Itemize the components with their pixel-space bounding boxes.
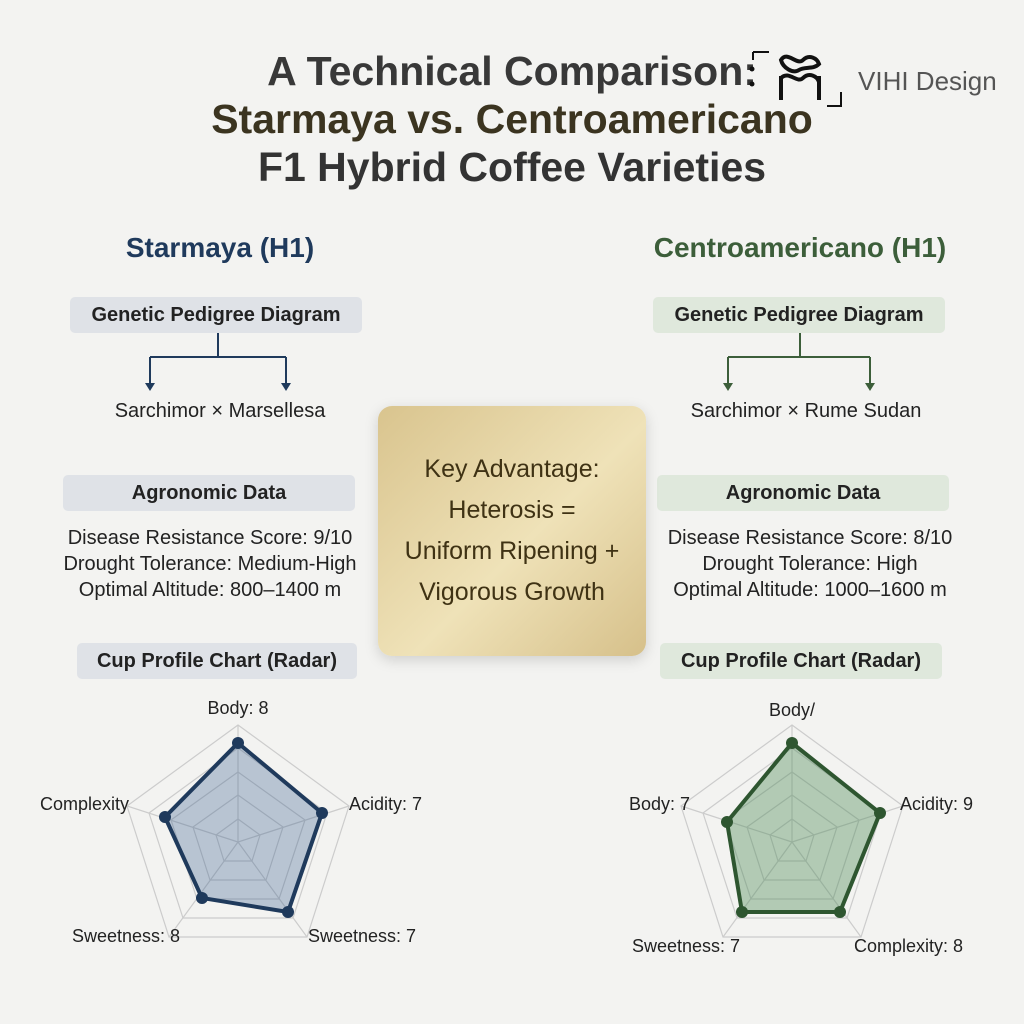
pill right pedigree <box>653 297 945 333</box>
radar chart right <box>629 700 973 956</box>
radar chart left: Sweetness: 7 <box>308 926 416 946</box>
radar chart right: Body: 7 <box>629 794 690 814</box>
pedigree text right: Sarchimor × Rume Sudan <box>691 400 921 422</box>
heading: Centroamericano: Centroamericano (H1) <box>654 232 946 263</box>
pedigree arrows right <box>723 333 875 391</box>
pill right cup profile: Cup Profile Chart (Radar) <box>681 650 921 672</box>
logo: VIHI Design <box>858 66 997 96</box>
agronomic text right: Disease Resistance Score: 8/10 <box>668 527 952 549</box>
radar chart left <box>40 698 422 946</box>
title <box>211 48 813 190</box>
radar chart left: Sweetness: 8 <box>72 926 180 946</box>
pill right cup profile <box>660 643 942 679</box>
pill left agronomic: Agronomic Data <box>132 482 286 504</box>
pill left cup profile <box>77 643 357 679</box>
center callout: key advantage: Uniform Ripening + <box>405 537 619 565</box>
center callout: key advantage: Vigorous Growth <box>419 578 605 606</box>
title: F1 Hybrid Coffee Varieties <box>258 144 766 190</box>
agronomic text right: Drought Tolerance: High <box>702 553 918 575</box>
radar chart right: Body/ <box>769 700 815 720</box>
pill left agronomic <box>63 475 355 511</box>
pedigree arrows left <box>145 333 291 391</box>
agronomic text left: Optimal Altitude: 800–1400 m <box>79 579 341 601</box>
heading: Starmaya: Starmaya (H1) <box>126 232 314 263</box>
center callout: key advantage: Key Advantage: <box>424 455 600 483</box>
radar chart right: Acidity: 9 <box>900 794 973 814</box>
pill left pedigree: Genetic Pedigree Diagram <box>92 304 340 326</box>
pill left cup profile: Cup Profile Chart (Radar) <box>97 650 337 672</box>
pill right pedigree: Genetic Pedigree Diagram <box>674 304 923 326</box>
title: Starmaya vs. Centroamericano <box>211 96 813 142</box>
pedigree text left: Sarchimor × Marsellesa <box>115 400 325 422</box>
agronomic text left: Drought Tolerance: Medium-High <box>63 553 357 575</box>
radar chart left: Complexity <box>40 794 129 814</box>
radar chart left: Body: 8 <box>207 698 269 718</box>
pill left pedigree <box>70 297 362 333</box>
center callout: key advantage: Heterosis = <box>448 496 576 524</box>
agronomic text right: Optimal Altitude: 1000–1600 m <box>673 579 947 601</box>
center callout: key advantage <box>378 406 646 656</box>
radar chart right: Complexity: 8 <box>854 936 963 956</box>
agronomic text left: Disease Resistance Score: 9/10 <box>68 527 352 549</box>
agronomic text left <box>63 527 357 601</box>
pill right agronomic: Agronomic Data <box>726 482 880 504</box>
radar chart left: Acidity: 7 <box>349 794 422 814</box>
agronomic text right <box>668 527 952 601</box>
radar chart right: Sweetness: 7 <box>632 936 740 956</box>
pill right agronomic <box>657 475 949 511</box>
logo <box>750 51 997 107</box>
title: A Technical Comparison: <box>267 48 757 94</box>
